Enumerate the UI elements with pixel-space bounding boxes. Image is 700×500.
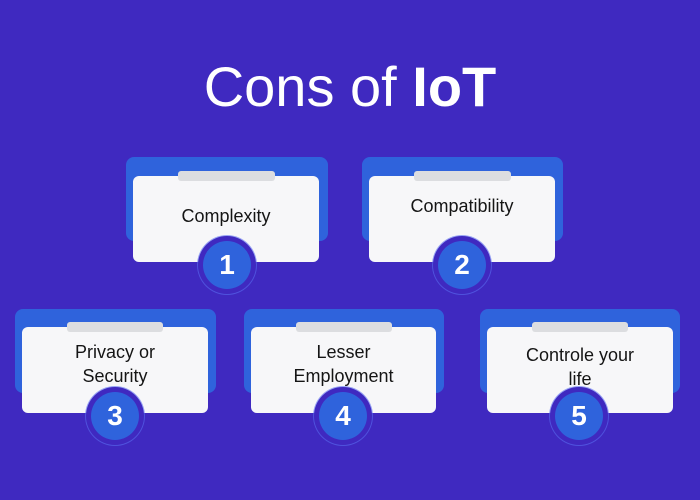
card 3: Privacy or Security [15, 309, 216, 446]
number 5 [555, 392, 603, 440]
number 1: 1 [219, 249, 235, 280]
card 3: Privacy or Security: Security [82, 366, 148, 386]
card 5: Controle your life: Controle your [526, 345, 634, 365]
card 2: Compatibility [362, 157, 563, 295]
number 4 [319, 392, 367, 440]
card 4: Lesser Employment [244, 309, 444, 446]
card 1: Complexity [126, 157, 328, 295]
card 2: Compatibility: Compatibility [410, 196, 514, 216]
number 4: 4 [335, 400, 351, 431]
number 5: 5 [571, 400, 587, 431]
card 3: Privacy or Security: Privacy or [75, 342, 155, 362]
card 5: Controle your life [480, 309, 680, 446]
title: Cons of IoT [204, 55, 496, 118]
card 1: Complexity: Complexity [181, 206, 271, 226]
card 4: Lesser Employment: Employment [293, 366, 394, 386]
number 2: 2 [454, 249, 470, 280]
number 1 [203, 241, 251, 289]
number 3: 3 [107, 400, 123, 431]
number 3 [91, 392, 139, 440]
card 5: Controle your life: life [568, 369, 592, 389]
number 2 [438, 241, 486, 289]
card 4: Lesser Employment: Lesser [316, 342, 370, 362]
